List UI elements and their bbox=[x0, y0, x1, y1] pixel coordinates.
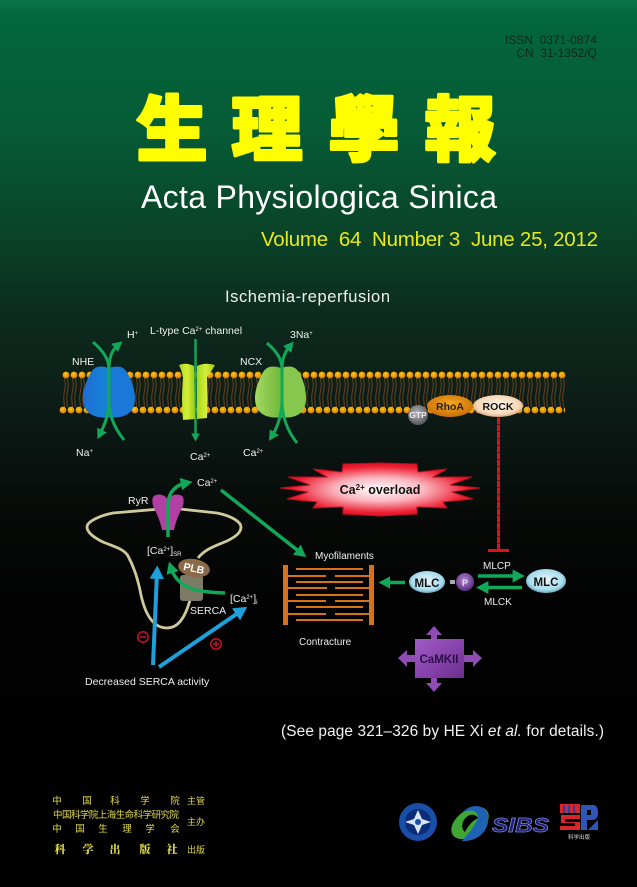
enzyme labels: MLCK bbox=[484, 597, 512, 608]
L-type calcium channel bbox=[179, 339, 215, 437]
MLC: MLC bbox=[534, 577, 558, 589]
myofilaments: Contracture bbox=[299, 637, 352, 648]
membrane labels: 2+ bbox=[196, 327, 203, 333]
row 3 bbox=[52, 821, 180, 835]
row 1: 国 bbox=[82, 793, 92, 807]
row 4: 版 bbox=[140, 841, 150, 857]
calcium overload burst: overload bbox=[365, 483, 420, 497]
GTP node: GTP bbox=[409, 410, 427, 420]
issn block: ISSN 0371-0874 bbox=[505, 33, 597, 47]
row 3: 会 bbox=[170, 821, 180, 835]
membrane labels: NCX bbox=[240, 356, 262, 368]
NCX exchanger bbox=[255, 343, 306, 443]
SR labels: [Ca bbox=[147, 545, 163, 557]
ROCK node: ROCK bbox=[483, 401, 514, 413]
enzyme labels: MLCP bbox=[483, 561, 511, 572]
calcium to myofilaments arrow bbox=[221, 490, 301, 553]
row 3: 学 bbox=[145, 821, 155, 835]
membrane labels: 2+ bbox=[203, 453, 211, 459]
SR labels: 2+ bbox=[246, 595, 254, 601]
SR labels: SR bbox=[173, 552, 182, 558]
row 1 bbox=[52, 793, 180, 807]
arrow to myofilaments bbox=[385, 581, 405, 584]
english title: Acta Physiologica Sinica bbox=[141, 179, 497, 215]
CaMKII block: CaMKII bbox=[420, 654, 458, 666]
reference note: (See page 321–326 by HE Xi et al. for details.) bbox=[281, 723, 604, 740]
row 1: 科 bbox=[110, 793, 120, 807]
PLB: PLB bbox=[182, 561, 206, 577]
phosphorylated MLC: MLC bbox=[415, 578, 439, 590]
enzyme labels bbox=[483, 561, 512, 608]
row 4: 学 bbox=[82, 841, 94, 857]
roles: 主管 bbox=[187, 794, 205, 807]
membrane labels: H bbox=[127, 329, 135, 341]
RyR channel bbox=[152, 495, 184, 530]
phosphorylated MLC bbox=[409, 571, 474, 593]
row 3: 理 bbox=[122, 821, 132, 835]
membrane labels: Na bbox=[76, 447, 89, 459]
SR labels bbox=[85, 477, 257, 688]
blue effect arrows bbox=[153, 573, 241, 667]
row 1: 院 bbox=[170, 793, 180, 807]
lipid bilayer bbox=[59, 371, 566, 414]
diagram: cell membrane bbox=[59, 325, 566, 463]
row 2: 中国科学院上海生命科学研究院 bbox=[53, 807, 179, 821]
figure heading: Ischemia-reperfusion bbox=[225, 288, 390, 306]
SR labels: 2+ bbox=[163, 547, 171, 553]
ROCK node bbox=[473, 395, 523, 417]
MLCP arrow bbox=[478, 574, 518, 578]
roles: 出版 bbox=[187, 843, 205, 856]
calcium overload burst: 2+ bbox=[356, 483, 365, 492]
issn block: CN 31-1352/Q bbox=[516, 46, 597, 60]
membrane labels: 2+ bbox=[256, 449, 264, 455]
SR membrane bbox=[87, 509, 241, 628]
issn block bbox=[505, 33, 597, 60]
chinese title: 報 bbox=[424, 74, 496, 176]
SR labels: SERCA bbox=[190, 605, 226, 617]
MLCK arrow bbox=[483, 586, 522, 589]
calcium uptake arrow bbox=[171, 568, 225, 593]
RhoA node: RhoA bbox=[436, 401, 464, 413]
chinese title: 理 bbox=[231, 74, 303, 176]
SR labels: RyR bbox=[128, 495, 149, 507]
PLB bbox=[177, 556, 211, 580]
RhoA node bbox=[427, 395, 473, 417]
phosphorylated MLC: P bbox=[462, 578, 468, 588]
myofilaments bbox=[286, 551, 374, 648]
membrane labels: + bbox=[309, 331, 313, 337]
membrane labels: NHE bbox=[72, 356, 94, 368]
SERCA pump bbox=[180, 575, 203, 601]
minus sign bbox=[138, 632, 148, 642]
membrane labels: Ca bbox=[190, 451, 203, 463]
membrane labels: + bbox=[135, 331, 139, 337]
membrane labels: + bbox=[89, 449, 93, 455]
sarcoplasmic reticulum diagram bbox=[85, 477, 301, 688]
logo: CAS bbox=[399, 803, 437, 841]
plus sign bbox=[211, 639, 221, 649]
volume line: Volume 64 Number 3 June 25, 2012 bbox=[261, 228, 598, 251]
row 1: 中 bbox=[52, 793, 62, 807]
membrane labels bbox=[72, 325, 313, 463]
NHE exchanger bbox=[83, 342, 135, 440]
row 3: 生 bbox=[98, 821, 108, 835]
MLC cycle bbox=[385, 561, 566, 608]
membrane labels: L-type Ca bbox=[150, 325, 196, 337]
membrane labels: Ca bbox=[243, 447, 256, 459]
CaMKII block bbox=[398, 626, 482, 692]
inhibition line from ROCK bbox=[488, 417, 509, 550]
calcium overload burst: Ca bbox=[340, 483, 356, 497]
GTP node bbox=[408, 405, 428, 425]
SR labels: ] bbox=[253, 593, 256, 605]
row 3: 国 bbox=[75, 821, 85, 835]
roles bbox=[187, 794, 205, 856]
calcium release arrow bbox=[168, 483, 186, 537]
row 1: 学 bbox=[140, 793, 150, 807]
membrane labels: 3Na bbox=[290, 329, 309, 341]
logo: SP bbox=[560, 804, 598, 841]
row 4: 出 bbox=[110, 841, 120, 857]
logo: SP: 科学出版 bbox=[568, 833, 590, 841]
row 4 bbox=[54, 841, 178, 857]
logo: SIBS bbox=[445, 800, 550, 846]
SR labels: Decreased SERCA activity bbox=[85, 676, 210, 688]
roles: 主办 bbox=[187, 815, 205, 828]
MLC bbox=[526, 569, 566, 593]
row 3: 中 bbox=[52, 821, 62, 835]
SR labels: Ca bbox=[197, 477, 210, 489]
calcium overload burst bbox=[280, 463, 480, 516]
row 4: 科 bbox=[54, 841, 66, 857]
myofilaments: Myofilaments bbox=[315, 551, 374, 562]
SR labels: [Ca bbox=[230, 593, 246, 605]
SR labels: ] bbox=[170, 545, 173, 557]
publisher credits bbox=[52, 793, 205, 857]
chinese title: 學 bbox=[328, 74, 400, 176]
logo: SIBS: SIBS bbox=[492, 815, 550, 837]
row 4: 社 bbox=[166, 841, 178, 857]
membrane labels: channel bbox=[202, 325, 242, 337]
chinese title: 生 bbox=[136, 74, 208, 176]
SR labels: 2+ bbox=[210, 479, 218, 485]
SR labels: i bbox=[256, 600, 257, 606]
chinese title bbox=[136, 74, 496, 176]
